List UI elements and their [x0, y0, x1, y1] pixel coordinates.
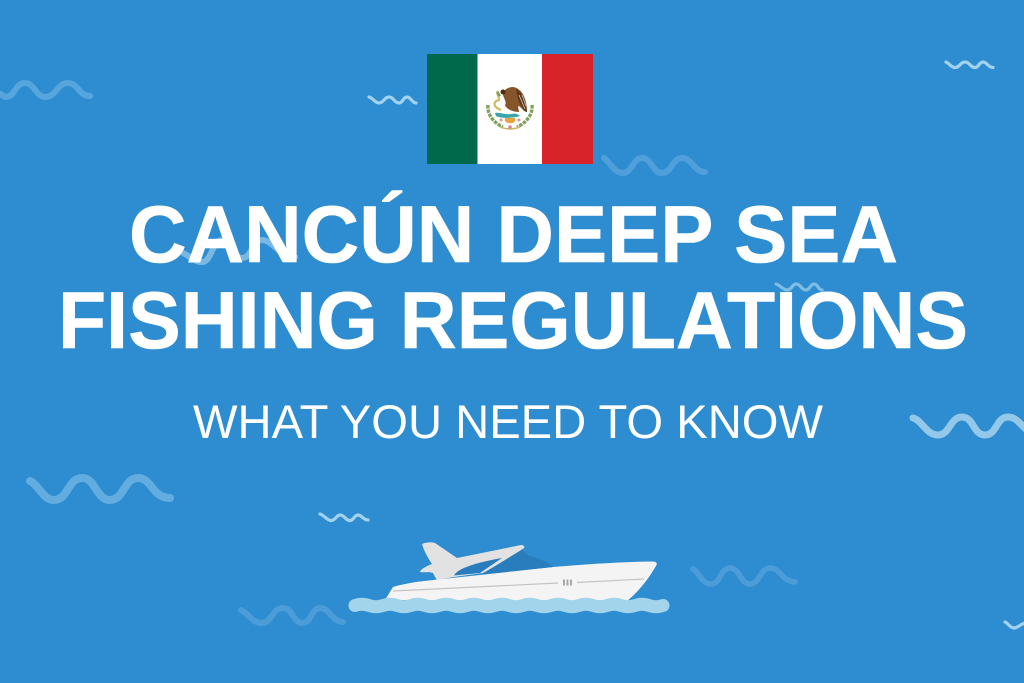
icon: white yacht on waves: [355, 542, 663, 607]
icon: coat of arms emblem: [488, 87, 532, 129]
title: CANCÚN DEEP SEA: [129, 189, 898, 280]
flag of Mexico: [427, 54, 593, 164]
title: FISHING REGULATIONS: [58, 276, 968, 366]
water under yacht: [355, 604, 663, 607]
subtitle: WHAT YOU NEED TO KNOW: [193, 395, 824, 448]
title: [58, 189, 968, 366]
